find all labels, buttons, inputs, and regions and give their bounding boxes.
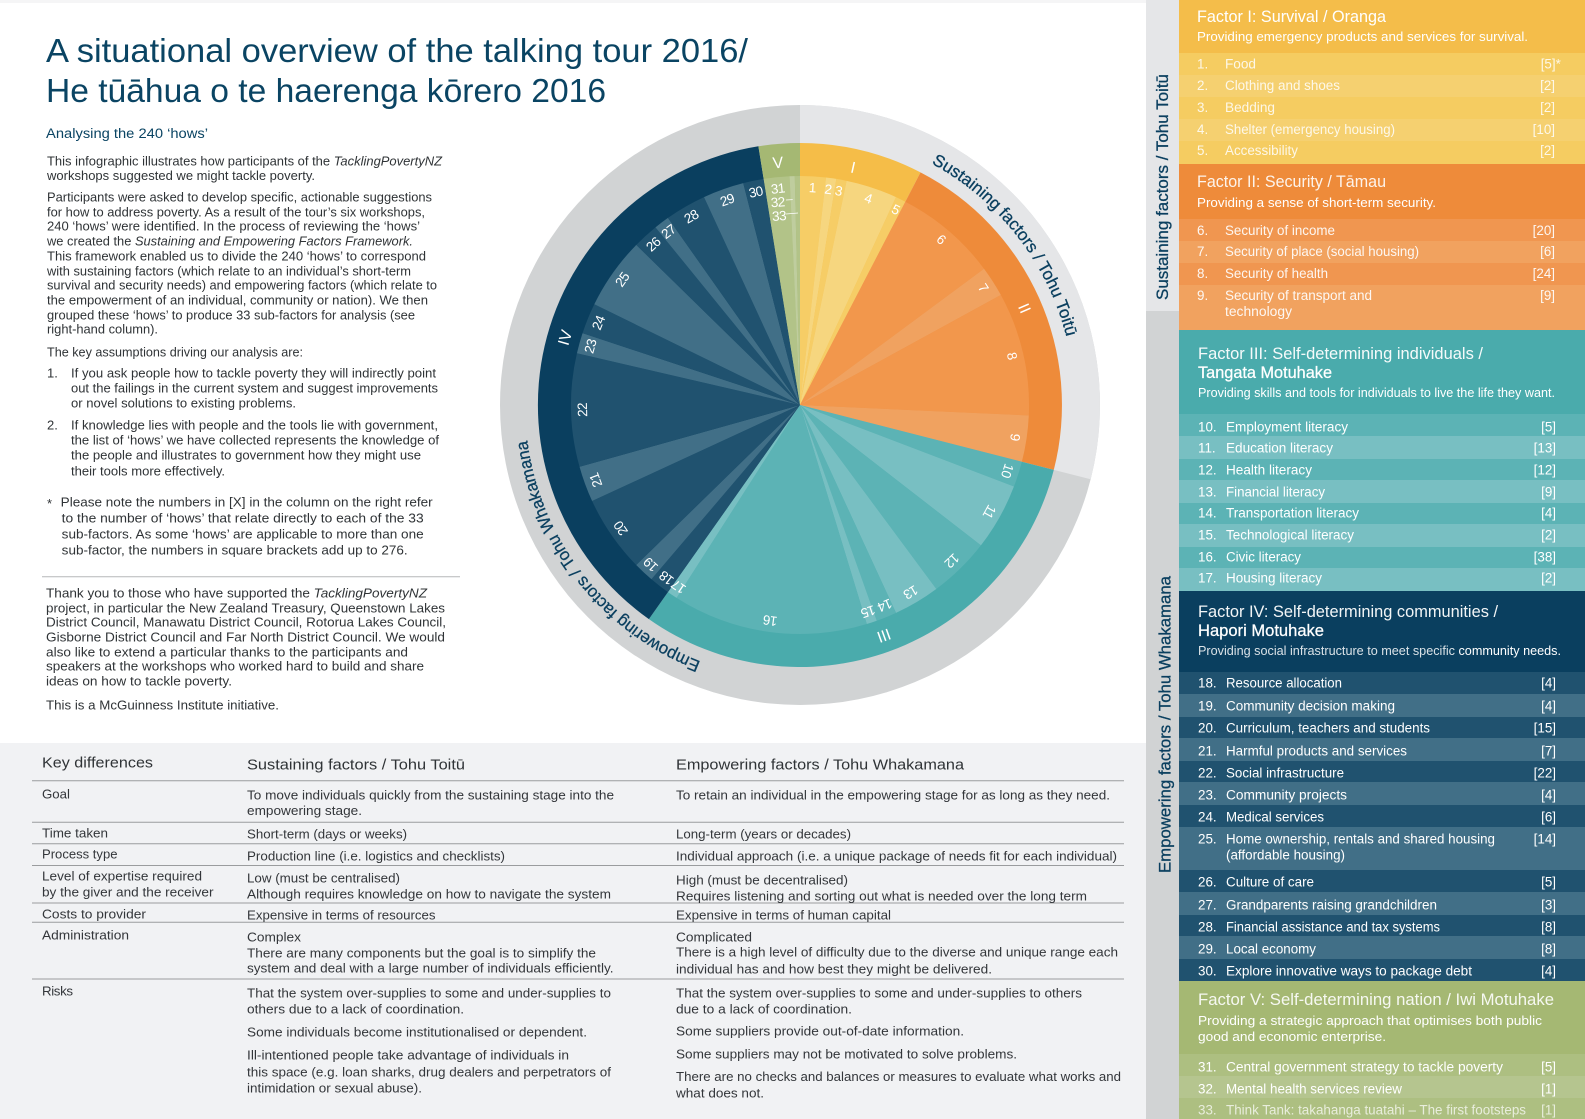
factor IV rows: [3]	[1541, 897, 1556, 912]
wedge number labels: 1	[808, 180, 816, 196]
table row: level of expertise	[42, 869, 1087, 903]
table row: process type	[42, 846, 1117, 864]
table row: costs to provider: Expensive in terms of human capital	[676, 907, 891, 922]
text block: footnote: sub-factor, the numbers in square brackets add up to 276.	[62, 543, 408, 558]
wedges: factor III	[668, 405, 1022, 634]
wedge number labels: 32	[770, 194, 785, 210]
factor I rows: Shelter (emergency housing)	[1225, 122, 1395, 137]
panel: key differences table	[0, 743, 1146, 1119]
factor III rows: Housing literacy	[1226, 570, 1322, 585]
factor IV rows: 22.	[1198, 765, 1217, 780]
factor I rows: 1.	[1197, 56, 1208, 72]
factor III rows: 10.	[1198, 420, 1217, 435]
text block: acknowledgements: This is a McGuinness Institute initiative.	[46, 697, 279, 712]
factor IV rows: [4]	[1541, 963, 1556, 978]
side strip: sustaining factors: Sustaining factors / Tohu Toitū	[1153, 74, 1172, 300]
factor V rows: [5]	[1541, 1060, 1556, 1075]
table row: time taken: Short-term (days or weeks)	[247, 826, 407, 841]
table row: goal: empowering stage.	[247, 803, 362, 818]
factor ring: III	[649, 405, 1054, 667]
factor IV rows: 24.	[1198, 809, 1217, 824]
factor II rows: [20]	[1533, 223, 1555, 238]
text block: introduction: we created the Sustaining and Empowering Factors Framework.	[46, 234, 413, 249]
factor II header: Factor II: Security / Tāmau	[1197, 173, 1386, 191]
factor IV rows: (affordable housing)	[1226, 847, 1345, 862]
arc label: sustaining factors: Sustaining factors / Tohu Toitū	[933, 154, 1077, 336]
factor IV rows: Harmful products and services	[1226, 743, 1407, 758]
wedges: factor IV	[571, 179, 800, 592]
table row: risks: That the system over-supplies to some and under-supplies to	[247, 985, 611, 1000]
factor IV header	[1179, 591, 1585, 672]
factor III rows: 17.	[1198, 570, 1217, 585]
table row: risks: due to a lack of coordination.	[676, 1001, 852, 1016]
wedge number labels: 3	[834, 183, 843, 199]
text block: acknowledgements: District Council, Manawatu District Council, Rotorua Lakes Council,	[46, 615, 446, 630]
text block: introduction: right-hand column).	[47, 321, 158, 336]
panel: factor V	[1179, 981, 1585, 1119]
factor IV rows: Local economy	[1226, 941, 1316, 956]
wedge number labels: 24	[589, 313, 609, 332]
factor II rows: 7.	[1197, 244, 1208, 259]
text block: introduction: This framework enabled us to divide the 240 ‘hows’ to correspond	[47, 249, 426, 264]
wedge number labels: 7	[975, 281, 991, 295]
factor II rows: 9.	[1197, 288, 1208, 303]
factor I rows: [2]	[1540, 100, 1555, 115]
table row: level of expertise: Level of expertise required	[42, 869, 202, 884]
table row: administration: Complex	[247, 929, 301, 944]
table row: level of expertise: by the giver and the receiver	[42, 884, 214, 899]
factor ring labels	[556, 155, 1033, 645]
factor IV rows: 26.	[1198, 874, 1217, 889]
factor IV rows: [15]	[1534, 720, 1556, 735]
factor ring labels: II	[1014, 301, 1033, 316]
text block: acknowledgements: ideas on how to tackle poverty.	[46, 674, 232, 689]
factor V rows: 33.	[1198, 1103, 1217, 1118]
table row: time taken: Long-term (years or decades)	[676, 826, 851, 841]
table row: level of expertise: Low (must be centralised)	[247, 870, 400, 885]
table row: risks: Some individuals become institutionalised or dependent.	[247, 1024, 587, 1039]
factor IV rows: 29.	[1198, 941, 1217, 956]
factor IV rows: 20.	[1198, 720, 1217, 735]
title: A situational overview of the talking tour 2016/	[46, 32, 749, 69]
factor IV rows: [14]	[1534, 831, 1556, 846]
numbered list: key assumptions	[47, 366, 439, 478]
table row: administration: There is a high level of difficulty due to the diverse and unique range each	[676, 944, 1118, 959]
factor III rows: [2]	[1541, 527, 1556, 542]
factor ring: II	[800, 172, 1062, 470]
factor II rows: Security of income	[1225, 223, 1335, 238]
factor II rows: [9]	[1540, 288, 1555, 303]
factor III header: Tangata Motuhake	[1198, 364, 1332, 382]
factor IV rows: 27.	[1198, 897, 1217, 912]
factor V rows	[1179, 1054, 1585, 1119]
factor IV rows: Community decision making	[1226, 698, 1395, 713]
table row: costs to provider	[42, 906, 891, 922]
table row: risks: Some suppliers provide out-of-date information.	[676, 1023, 964, 1038]
factor ring labels: I	[849, 160, 857, 177]
wedge number labels: 15	[859, 602, 877, 621]
factor IV header: Hapori Motuhake	[1198, 622, 1324, 640]
text block: introduction: survival and security needs) and empowering factors (which relate to	[47, 277, 437, 292]
factor III rows: Technological literacy	[1226, 527, 1354, 542]
factor IV rows: [7]	[1541, 743, 1556, 758]
factor IV rows: [4]	[1541, 675, 1556, 690]
table header	[42, 755, 965, 773]
factor ring labels: V	[772, 155, 784, 172]
table row: risks: this space (e.g. loan sharks, drug dealers and perpetrators of	[247, 1064, 611, 1079]
factor V header	[1179, 981, 1585, 1054]
numbered list: key assumptions: the list of ‘hows’ we have collected represents the knowledge of	[71, 433, 439, 448]
wedge number labels: 30	[747, 183, 764, 201]
table row: costs to provider: Expensive in terms of resources	[247, 907, 436, 922]
panel: factor IV	[1179, 591, 1585, 981]
text block: acknowledgements: also like to extend a particular thanks to the participants and	[46, 645, 408, 660]
wedge number labels: 11	[980, 502, 999, 521]
wedge number labels: 13	[901, 582, 921, 602]
factor I rows: Accessibility	[1225, 143, 1298, 158]
factor I rows	[1179, 53, 1585, 164]
table row: administration: There are many components but the goal is to simplify the	[247, 945, 596, 960]
factor I rows: 3.	[1197, 100, 1208, 115]
wedges: factor II	[800, 202, 1029, 462]
wedge number labels: 21	[586, 471, 605, 489]
text block: footnote: *	[47, 496, 52, 511]
table row: administration	[42, 927, 1118, 976]
wedge number labels: 4	[863, 190, 875, 207]
wedge number labels: 22	[575, 403, 590, 417]
panel: factor I	[1179, 0, 1585, 164]
factor IV rows: 23.	[1198, 787, 1217, 802]
wedge number labels: 19	[641, 554, 661, 575]
factor ring labels: IV	[556, 328, 576, 347]
factor I rows: [2]	[1540, 78, 1555, 93]
wedge number labels: 12	[942, 550, 962, 571]
numbered list: key assumptions: out the failings in the current system and suggest improvements	[71, 381, 438, 396]
factor I header: Factor I: Survival / Oranga	[1197, 8, 1387, 26]
wedge number labels: 23	[581, 338, 600, 355]
text block: introduction	[46, 154, 443, 360]
factor V rows: 31.	[1198, 1060, 1217, 1075]
factor IV rows: Resource allocation	[1226, 675, 1342, 690]
text block: introduction: workshops suggested we might tackle poverty.	[46, 168, 315, 183]
table row: goal	[42, 786, 1110, 818]
factor III rows: Transportation literacy	[1226, 505, 1359, 520]
outer ring: empowering factors	[500, 105, 1100, 705]
text block: footnote	[47, 495, 433, 558]
table row: administration: Administration	[42, 927, 129, 942]
title	[46, 32, 749, 109]
table row: risks: Some suppliers may not be motivated to solve problems.	[676, 1046, 1017, 1061]
factor IV rows: [8]	[1541, 941, 1556, 956]
factor V header: Factor V: Self-determining nation / Iwi Motuhake	[1198, 991, 1554, 1009]
table row: level of expertise: High (must be decentralised)	[676, 872, 848, 887]
wedge number labels: 5	[889, 201, 902, 218]
table row: administration: Complicated	[676, 929, 752, 944]
factor II rows: technology	[1225, 304, 1292, 319]
factor I rows: 2.	[1197, 78, 1208, 93]
factor IV rows: Explore innovative ways to package debt	[1226, 963, 1472, 978]
factor II rows: Security of health	[1225, 266, 1328, 281]
numbered list: key assumptions: their tools more effectively.	[71, 463, 225, 478]
wedge number labels: 10	[998, 462, 1017, 480]
table row: goal: Goal	[42, 786, 70, 801]
factor I rows: Clothing and shoes	[1225, 78, 1340, 93]
factor II rows: 8.	[1197, 266, 1208, 281]
factor II header	[1179, 164, 1585, 219]
factor III rows	[1179, 414, 1585, 591]
factor IV rows: Grandparents raising grandchildren	[1226, 897, 1437, 912]
factor II rows: [24]	[1533, 266, 1555, 281]
numbered list: key assumptions: 2.	[47, 418, 58, 433]
factor III header: Factor III: Self-determining individuals /	[1198, 345, 1483, 363]
factor I header: Providing emergency products and services for survival.	[1197, 29, 1528, 44]
factor V rows: Think Tank: takahanga tuatahi – The first footsteps	[1226, 1103, 1526, 1118]
text block: acknowledgements: speakers at the workshops who worked hard to build and share	[46, 659, 424, 674]
wedge number labels: 18	[657, 568, 677, 588]
table row: administration: system and deal with a large number of individuals efficiently.	[247, 960, 614, 975]
factor I rows: [5]*	[1541, 56, 1561, 72]
factor III rows: [38]	[1534, 549, 1556, 564]
factor III rows: [9]	[1541, 484, 1556, 499]
outer ring: sustaining factors	[800, 105, 1100, 479]
factor II rows: Security of place (social housing)	[1225, 244, 1419, 259]
table row: costs to provider: Costs to provider	[42, 906, 147, 921]
arc label: empowering factors: Empowering factors / Tohu Whakamana	[518, 440, 700, 672]
table header: Empowering factors / Tohu Whakamana	[676, 756, 965, 773]
table row: risks: Ill-intentioned people take advantage of individuals in	[247, 1047, 569, 1062]
factor III rows: Education literacy	[1226, 440, 1333, 455]
factor III rows: 11.	[1198, 440, 1216, 455]
factor IV header: Factor IV: Self-determining communities /	[1198, 603, 1498, 621]
factor IV rows: 21.	[1198, 743, 1217, 758]
factor IV rows: Curriculum, teachers and students	[1226, 720, 1430, 735]
wedge number labels: 2	[824, 181, 832, 197]
text block: introduction: for how to address poverty. As a result of the tour’s six workshops,	[47, 205, 425, 220]
text block: acknowledgements: Gisborne District Council and Far North District Council. We would	[46, 630, 445, 645]
factor II header: Providing a sense of short-term security.	[1197, 195, 1436, 210]
factor III header: Providing skills and tools for individuals to live the life they want.	[1198, 385, 1555, 400]
table row: process type: Production line (i.e. logistics and checklists)	[247, 848, 505, 864]
wedge number labels: 16	[762, 612, 778, 629]
table row: administration: individual has and how best they might be delivered.	[676, 961, 992, 976]
table row: time taken: Time taken	[42, 825, 108, 840]
factor I rows: Bedding	[1225, 100, 1275, 115]
text block: acknowledgements: Thank you to those who have supported the TacklingPovertyNZ	[46, 586, 428, 601]
text block: introduction: This infographic illustrates how participants of the TacklingPovertyNZ	[47, 154, 443, 169]
wedge number labels: 26	[643, 234, 664, 255]
factor IV rows: Financial assistance and tax systems	[1226, 919, 1440, 934]
factor IV rows: [22]	[1534, 765, 1556, 780]
factor ring: IV	[538, 146, 800, 619]
numbered list: key assumptions: If you ask people how to tackle poverty they will indirectly point	[71, 366, 436, 381]
side strip: empowering factors	[1146, 311, 1179, 1119]
text block: introduction: with sustaining factors (which relate to an individual’s short-term	[46, 264, 411, 279]
table row: level of expertise: Although requires knowledge on how to navigate the system	[247, 886, 611, 901]
factor I rows: [2]	[1540, 143, 1555, 158]
panel: factor II	[1179, 164, 1585, 330]
wedge number labels: 27	[659, 221, 679, 242]
factor II rows: [6]	[1540, 244, 1555, 259]
factor III rows: [5]	[1541, 420, 1556, 435]
factor III rows: 12.	[1198, 462, 1217, 477]
subheading: analysing the hows: Analysing the 240 ‘hows’	[46, 126, 208, 141]
factor V header: Providing a strategic approach that optimises both public	[1198, 1013, 1542, 1028]
wedge number labels: 25	[612, 270, 632, 290]
wedge number labels: 14	[875, 596, 894, 615]
factor I rows: 4.	[1197, 122, 1208, 137]
factor V rows: 32.	[1198, 1082, 1217, 1097]
factor III rows: [12]	[1534, 462, 1556, 477]
table row: level of expertise: Requires listening and sorting out what is needed over the long term	[676, 888, 1087, 903]
text block: footnote: sub-factors. As some ‘hows’ are applicable to more than one	[62, 527, 424, 542]
factor III rows: [2]	[1541, 570, 1556, 585]
wedges: factor I	[800, 176, 905, 405]
wedges: factor V	[764, 176, 800, 405]
table row: risks: That the system over-supplies to some and under-supplies to others	[676, 985, 1082, 1000]
text block: acknowledgements: project, in particular the New Zealand Treasury, Queenstown Lakes	[46, 601, 446, 616]
factor III rows: Civic literacy	[1226, 549, 1301, 564]
side strip: sustaining factors	[1146, 0, 1179, 311]
factor III rows: 16.	[1198, 549, 1217, 564]
factor I header	[1179, 0, 1585, 53]
factor III rows: Financial literacy	[1226, 484, 1325, 499]
pie chart: factors wheel	[500, 105, 1100, 705]
text block: introduction: 240 ‘hows’ were identified. In the process of reviewing the ‘hows’	[47, 219, 420, 234]
table row: risks	[42, 983, 1121, 1100]
factor V rows: [1]	[1541, 1082, 1556, 1097]
panel: factor III	[1179, 330, 1585, 591]
table row: goal: To move individuals quickly from the sustaining stage into the	[247, 787, 614, 802]
wedge number labels: 17	[669, 577, 689, 597]
factor IV rows: Community projects	[1226, 787, 1347, 802]
wedge number labels: 31	[770, 180, 785, 197]
factor IV rows: [5]	[1541, 874, 1556, 889]
factor IV rows: 25.	[1198, 831, 1217, 846]
factor III rows: [13]	[1534, 440, 1556, 455]
numbered list: key assumptions: 1.	[47, 366, 58, 381]
factor I rows: 5.	[1197, 143, 1208, 158]
text block: footnote: to the number of ‘hows’ that relate directly to each of the 33	[62, 511, 424, 526]
table header: Sustaining factors / Tohu Toitū	[247, 756, 465, 773]
factor IV header: Providing social infrastructure to meet specific community needs.	[1198, 643, 1561, 658]
factor III rows: 14.	[1198, 505, 1217, 520]
table row: risks: what does not.	[675, 1085, 764, 1100]
factor V rows: Mental health services review	[1226, 1082, 1402, 1097]
side strip: empowering factors: Empowering factors / Tohu Whakamana	[1156, 575, 1174, 873]
factor IV rows: [8]	[1541, 919, 1556, 934]
factor ring: V	[758, 143, 800, 405]
table row: process type: Individual approach (i.e. a unique package of needs fit for each individual)	[676, 848, 1117, 863]
text block: acknowledgements	[46, 586, 446, 712]
wedge number labels: 9	[1007, 433, 1023, 442]
factor IV rows: 18.	[1198, 675, 1217, 690]
factor I rows: Food	[1225, 56, 1256, 72]
wedge number labels: 29	[718, 191, 736, 209]
table row: time taken	[42, 825, 851, 841]
factor III rows: 13.	[1198, 484, 1217, 499]
factor V rows: Central government strategy to tackle poverty	[1226, 1060, 1503, 1075]
factor IV rows: 19.	[1198, 698, 1217, 713]
factor IV rows: Medical services	[1226, 809, 1324, 824]
factor IV rows: Culture of care	[1226, 874, 1314, 889]
factor V rows: [1]	[1541, 1103, 1556, 1118]
factor III rows: Employment literacy	[1226, 420, 1348, 435]
table header: Key differences	[42, 755, 153, 772]
wedge number labels: 6	[934, 231, 949, 247]
text block: introduction: The key assumptions driving our analysis are:	[47, 345, 303, 360]
factor IV rows: Home ownership, rentals and shared housing	[1226, 831, 1495, 846]
factor II rows: 6.	[1197, 223, 1208, 238]
wedge number labels: 20	[611, 518, 631, 538]
factor ring: I	[800, 143, 920, 405]
text block: introduction: grouped these ‘hows’ to produce 33 sub-factors for analysis (see	[47, 307, 415, 322]
numbered list: key assumptions: If knowledge lies with people and the tools lie with government,	[71, 418, 438, 433]
factor ring labels: III	[874, 624, 893, 645]
factor IV rows: Social infrastructure	[1226, 765, 1344, 780]
factor IV rows	[1179, 672, 1585, 981]
table row: risks: intimidation or sexual abuse).	[247, 1080, 422, 1095]
numbered list: key assumptions: or novel solutions to existing problems.	[71, 396, 296, 411]
table row: risks: Risks	[42, 983, 73, 998]
factor III rows: [4]	[1541, 505, 1556, 520]
factor IV rows: 30.	[1198, 963, 1217, 978]
factor IV rows: [6]	[1541, 809, 1556, 824]
text block: footnote: Please note the numbers in [X] in the column on the right refer	[61, 495, 433, 510]
factor II rows	[1179, 219, 1585, 330]
factor IV rows: [4]	[1541, 787, 1556, 802]
wedge number labels: 8	[1004, 351, 1020, 361]
title: He tūāhua o te haerenga kōrero 2016	[46, 72, 606, 109]
table row: goal: To retain an individual in the empowering stage for as long as they need.	[676, 787, 1110, 802]
factor IV rows: 28.	[1198, 919, 1217, 934]
factor III header	[1179, 330, 1585, 414]
table row: risks: There are no checks and balances or measures to evaluate what works and	[676, 1069, 1121, 1084]
factor II rows: Security of transport and	[1225, 288, 1372, 303]
numbered list: key assumptions: the people and illustrates to government how they might use	[71, 448, 421, 463]
factor IV rows: [4]	[1541, 698, 1556, 713]
text block: introduction: Participants were asked to develop specific, actionable suggestions	[47, 190, 432, 205]
wedge number labels	[575, 180, 1023, 629]
factor V header: good and economic enterprise.	[1198, 1029, 1386, 1044]
table row: risks: others due to a lack of coordination.	[247, 1001, 464, 1016]
factor III rows: 15.	[1198, 527, 1217, 542]
wedge number labels: 33	[772, 208, 787, 224]
factor III rows: Health literacy	[1226, 462, 1312, 477]
text block: introduction: the empowerment of an individual, community or nation). We then	[47, 292, 428, 307]
table row: process type: Process type	[42, 846, 118, 861]
factor I rows: [10]	[1533, 122, 1555, 137]
wedge number labels: 28	[682, 207, 701, 227]
